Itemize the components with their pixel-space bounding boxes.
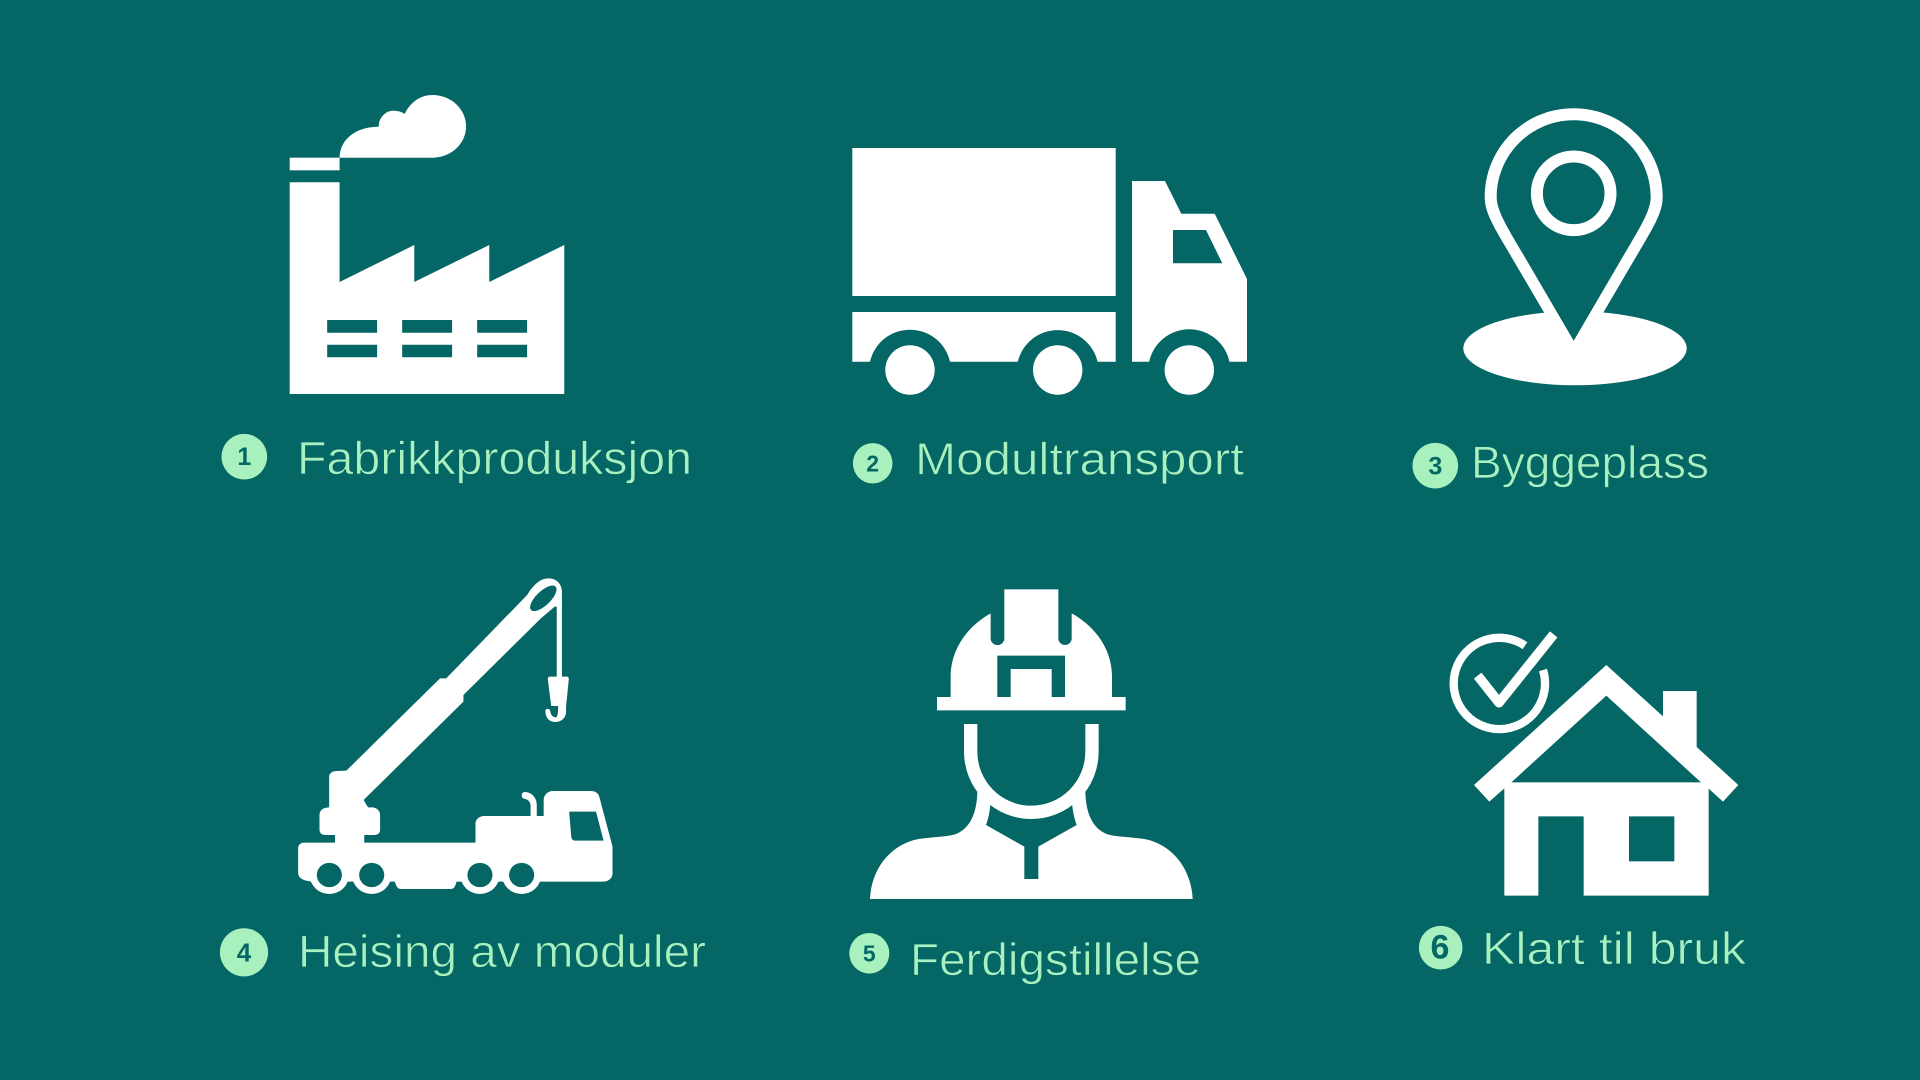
icon: truck [852, 148, 1247, 395]
panel: step 1 factory production [222, 95, 692, 484]
icon: house with check mark [1454, 634, 1738, 896]
panel: step 2 module transport [852, 148, 1247, 484]
number badge 1 [222, 434, 267, 480]
icon: construction worker [870, 589, 1193, 899]
icon: location pin [1463, 108, 1687, 385]
number badge 3 [1412, 443, 1458, 489]
number badge 6: 6 [1431, 928, 1449, 966]
panel: step 6 ready for use [1419, 634, 1747, 974]
panel: step 4 lifting modules [220, 578, 706, 977]
number badge 4: 4 [237, 938, 252, 968]
panel: step 5 completion [849, 589, 1201, 985]
label: Klart til bruk: Klart til bruk [1482, 923, 1747, 974]
icon: mobile crane [298, 578, 613, 894]
label: Ferdigstillelse: Ferdigstillelse [910, 934, 1201, 985]
number badge 6 [1419, 926, 1462, 970]
label: Byggeplass: Byggeplass [1471, 437, 1709, 488]
number badge 5 [849, 933, 889, 974]
number badge 3: 3 [1428, 452, 1442, 480]
number badge 2 [853, 443, 892, 483]
panel: step 3 building site [1412, 108, 1709, 489]
number badge 2: 2 [866, 450, 879, 476]
label: Modultransport: Modultransport [915, 433, 1245, 484]
label: Heising av moduler: Heising av moduler [298, 926, 706, 977]
number badge 4 [220, 928, 268, 976]
icon: factory [290, 95, 564, 394]
number badge 5: 5 [863, 940, 876, 966]
number badge 1: 1 [237, 443, 251, 471]
label: Fabrikkproduksjon: Fabrikkproduksjon [297, 432, 692, 484]
